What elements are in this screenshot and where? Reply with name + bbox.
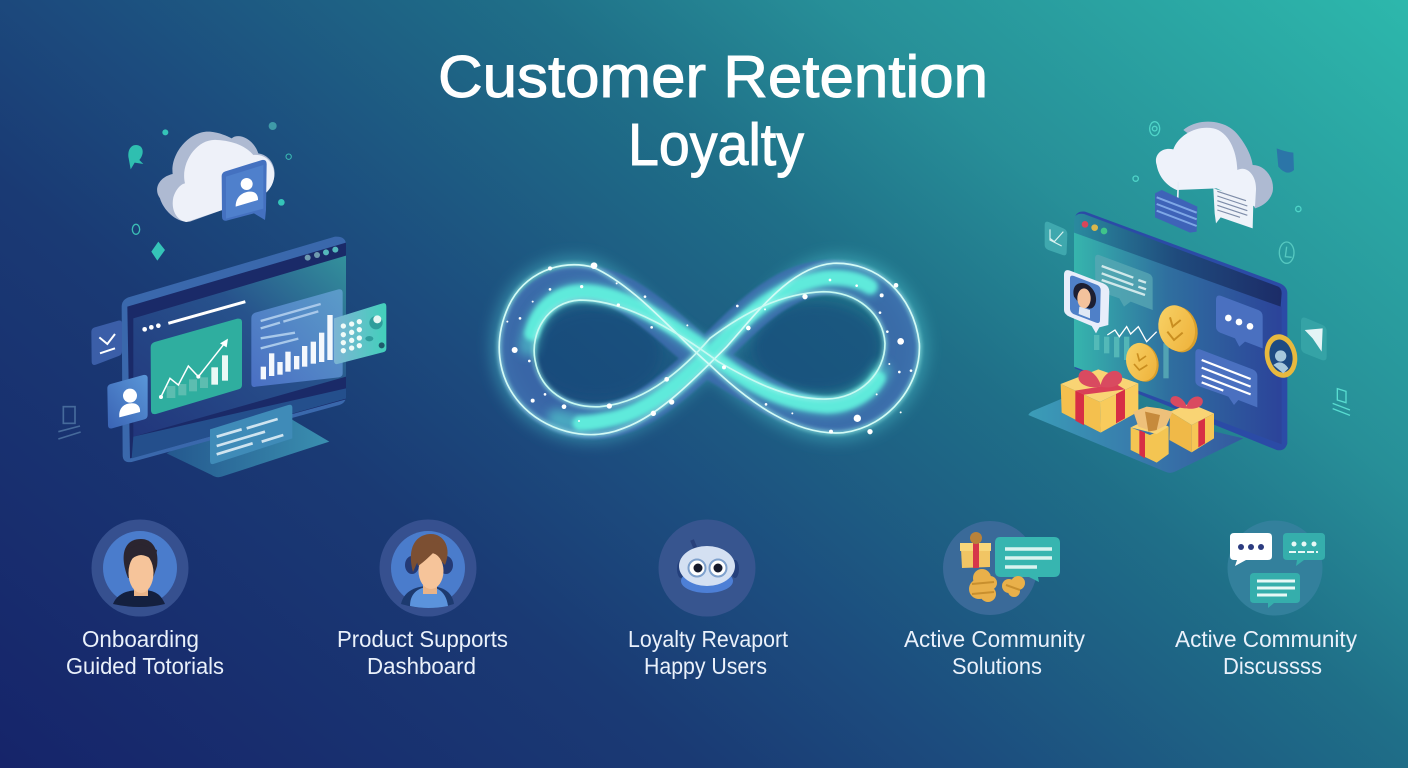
translucent band: [515, 277, 902, 422]
icon: cloud with user bubble: [157, 132, 275, 222]
icon: send tile: [1301, 317, 1327, 360]
label: Discussss: [1223, 653, 1322, 679]
icon: person avatar: [92, 520, 188, 616]
monitor: [1074, 212, 1287, 450]
illustration: analytics monitor with cloud: [58, 122, 386, 477]
bright stripes: [532, 278, 878, 423]
blue bubble: dots: [1216, 295, 1263, 348]
chart bars and line: [1094, 327, 1169, 378]
label: Solutions: [952, 653, 1042, 679]
step: community discussions: [1175, 520, 1357, 679]
overlay panel: keypad: [334, 303, 386, 364]
label: [904, 626, 1085, 679]
step: product support: [337, 520, 508, 679]
label: [337, 626, 508, 679]
label: [66, 626, 224, 679]
icon: gifts and chat bubble: [943, 521, 1060, 615]
label: Loyalty Revaport: [628, 626, 789, 652]
icon: discussion bubbles: [1228, 520, 1325, 616]
gift: large: [1061, 369, 1138, 433]
label: Guided Totorials: [66, 653, 224, 679]
faded message bubble: [1095, 255, 1153, 310]
title: Loyalty: [628, 112, 804, 178]
monitor: [122, 237, 386, 462]
icon: chart tile: [1045, 222, 1067, 255]
chart card: bars and text: [251, 289, 343, 387]
step: loyalty: [628, 520, 789, 679]
illustration: rewards and community monitor: [1028, 122, 1350, 473]
outer line: [499, 263, 919, 435]
blue bubble: text: [1195, 349, 1257, 407]
gift: small open: [1131, 407, 1173, 463]
platform: [1028, 397, 1243, 473]
gold avatar ring: [1261, 331, 1301, 381]
coins: [1122, 301, 1203, 385]
label: Onboarding: [82, 626, 199, 652]
icon: user tile: [107, 375, 148, 429]
title: Customer Retention: [438, 44, 988, 110]
line glow: [499, 263, 919, 435]
glow under bright stripes: [528, 278, 882, 423]
label: Active Community: [904, 626, 1085, 652]
icon: robot: [658, 520, 756, 616]
inner line: [534, 292, 885, 407]
gift: medium: [1169, 396, 1214, 452]
label: Product Supports: [337, 626, 508, 652]
label: [1175, 626, 1357, 679]
decorative floating icons: [1133, 122, 1350, 415]
outer halo: [499, 263, 919, 435]
label: Active Community: [1175, 626, 1357, 652]
icon: support agent with headset: [380, 520, 476, 616]
chart card: growth line: [151, 319, 242, 414]
step: community solutions: [904, 521, 1085, 679]
portrait card: [1064, 270, 1109, 333]
text card on stand: [210, 405, 292, 464]
title: [438, 44, 988, 178]
sparkles: [506, 262, 912, 434]
infinity loop: [499, 262, 919, 435]
icon: faint laptop: [58, 407, 81, 439]
dark interior: [533, 303, 880, 397]
label: [628, 626, 789, 679]
decorative floating particles: [128, 122, 291, 261]
icon: download tile: [91, 321, 122, 365]
icon: cloud with server and document: [1155, 122, 1273, 233]
step: onboarding: [66, 520, 224, 679]
label: Happy Users: [644, 653, 767, 679]
monitor stand: [167, 418, 329, 477]
label: Dashboard: [367, 653, 476, 679]
